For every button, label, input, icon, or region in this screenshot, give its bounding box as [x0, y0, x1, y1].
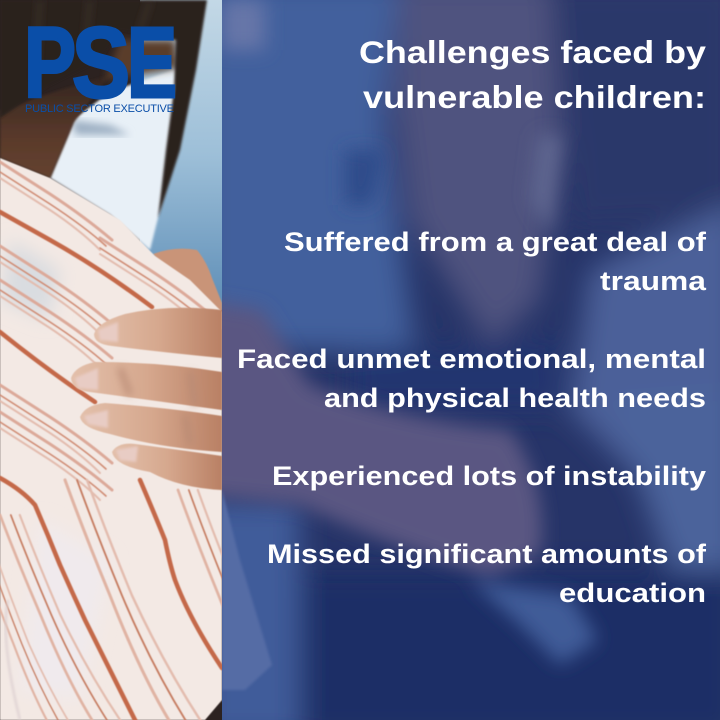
- ring finger: [80, 403, 222, 452]
- text: health needs: Faced unmet emotional, mental: [237, 344, 706, 374]
- panel: blue tinted photo overlay: [200, 0, 720, 720]
- blurred shirt hem: [222, 490, 272, 690]
- hand: fingers: [71, 308, 222, 490]
- text: trauma: Suffered from a great deal of: [284, 227, 706, 257]
- logo: PSE Public Sector Executive: PUBLIC SECTOR EXECUTIVE: [25, 103, 174, 115]
- title: [359, 34, 707, 115]
- little finger: [112, 444, 222, 490]
- background: blue shirt: [140, 0, 222, 310]
- white shirt behind neck: [50, 68, 180, 250]
- logo: PSE Public Sector Executive: S: [72, 7, 130, 119]
- blurred cuff: [470, 580, 598, 665]
- logo: PSE Public Sector Executive: [24, 7, 177, 119]
- middle finger: [71, 362, 222, 410]
- logo: PSE Public Sector Executive: E: [127, 7, 177, 119]
- text: instability: Experienced lots of instability: [272, 461, 706, 491]
- index finger: [94, 308, 222, 358]
- hair: [0, 0, 207, 218]
- nails: [98, 322, 118, 342]
- text: trauma: [284, 227, 706, 296]
- title: vulnerable children:: [363, 79, 706, 115]
- striped shirt: [0, 158, 222, 720]
- text: missed education: Missed significant amounts of: [267, 539, 706, 569]
- knuckles: [117, 368, 198, 409]
- text: missed education: [267, 539, 706, 608]
- neck: [0, 75, 110, 178]
- blurred hand and forearm: [200, 300, 542, 575]
- text: missed education: education: [559, 578, 706, 608]
- text: health needs: and physical health needs: [324, 383, 706, 413]
- text: health needs: [237, 344, 706, 413]
- photo: carer's hand on child's shoulder: [0, 0, 222, 720]
- title: Challenges faced by: [359, 34, 707, 70]
- thumb: [153, 249, 222, 330]
- text: trauma: trauma: [600, 266, 706, 296]
- logo: PSE Public Sector Executive: P: [24, 7, 76, 119]
